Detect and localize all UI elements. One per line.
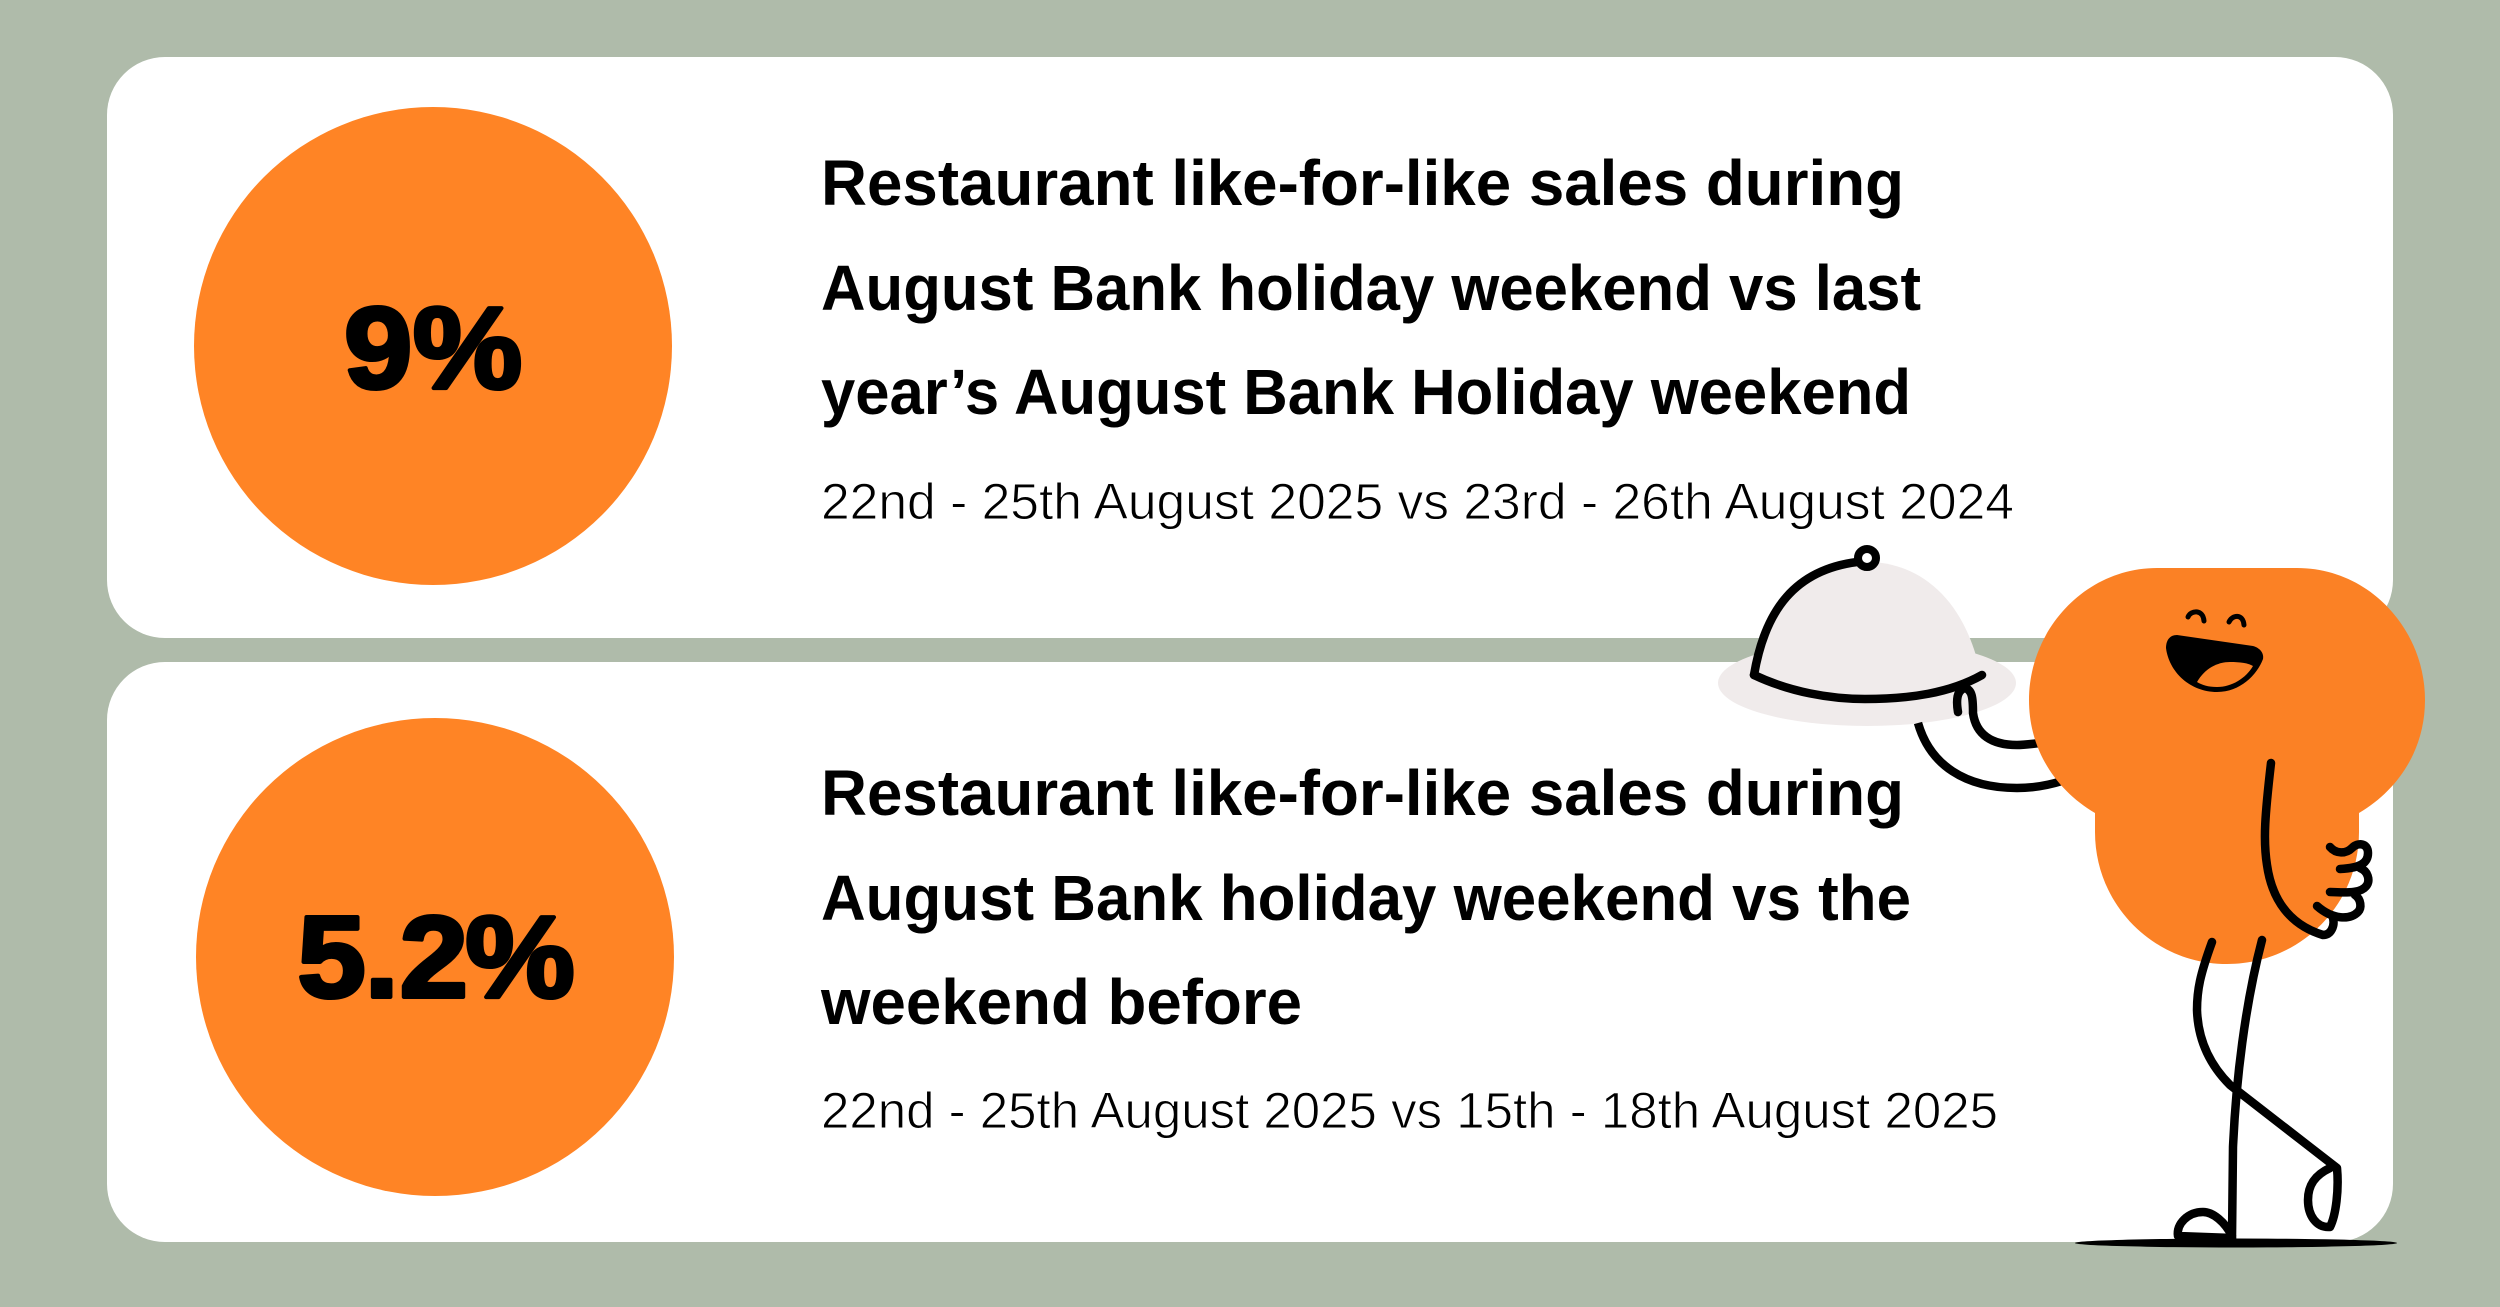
stat circle: 9%: 9%: [344, 284, 522, 413]
ground shadow: [2075, 1238, 2397, 1248]
illustration: waiter character with cloche: [1718, 549, 2425, 1248]
arm holding the tray: [1918, 688, 2062, 788]
heading: comparison with weekend before: weekend before: [820, 966, 1302, 1038]
face: [2166, 612, 2263, 692]
heading: comparison with last year: [821, 147, 1921, 428]
icon: serving cloche: [1718, 549, 2016, 726]
stat circle: 9%: [194, 107, 672, 585]
heading: comparison with last year: year’s August Bank Holiday weekend: [821, 356, 1911, 428]
heading: comparison with weekend before: [820, 757, 1911, 1038]
right arm and hand: [2265, 763, 2368, 935]
heading: comparison with weekend before: Restaurant like-for-like sales during: [821, 757, 1904, 829]
panel: August Bank Holiday vs last year: [107, 57, 2393, 638]
date range text: 22nd - 25th August 2025 vs 23rd - 26th August 2024: [821, 473, 2014, 530]
legs and feet: [2178, 940, 2338, 1238]
heading: comparison with last year: August Bank holiday weekend vs last: [821, 252, 1921, 324]
stat circle: 5.2%: [196, 718, 674, 1196]
body: [2029, 568, 2425, 964]
heading: comparison with last year: Restaurant like-for-like sales during: [821, 147, 1904, 219]
date range text: 22nd - 25th August 2025 vs 15th - 18th August 2025: [821, 1082, 1998, 1139]
stat circle: 5.2%: 5.2%: [297, 893, 575, 1022]
heading: comparison with weekend before: August Bank holiday weekend vs the: [821, 862, 1911, 934]
panel: August Bank Holiday vs weekend before: [107, 662, 2393, 1242]
